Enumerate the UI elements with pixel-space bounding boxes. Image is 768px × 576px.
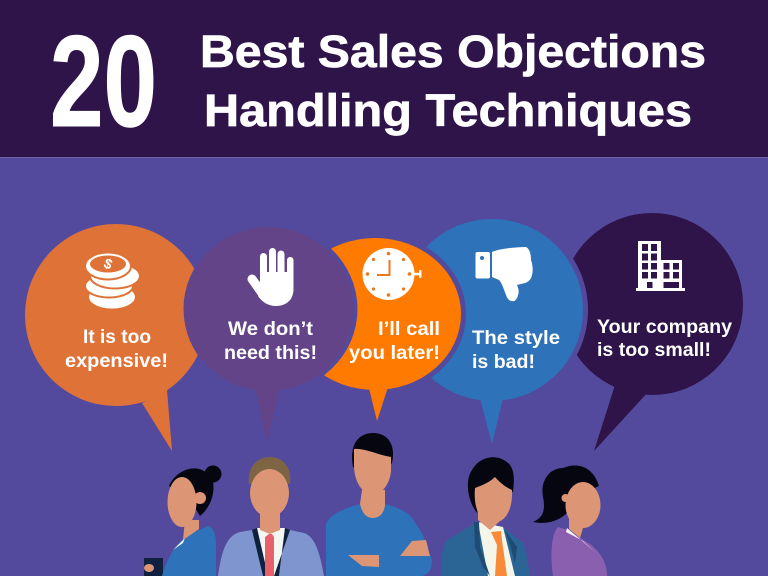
speech bubble: style is bad xyxy=(396,214,588,444)
icon: thumbs down xyxy=(476,247,533,301)
icon: clock xyxy=(362,248,422,300)
label: the style is bad: is bad! xyxy=(472,351,535,373)
title text: Best Sales Objections xyxy=(200,26,706,77)
label: it is too expensive: expensive! xyxy=(65,350,168,372)
label: the style is bad xyxy=(472,327,560,373)
speech bubble: call you later xyxy=(284,233,466,421)
icon: coins xyxy=(85,252,140,310)
label: the style is bad: The style xyxy=(472,327,560,349)
person: woman with ponytail xyxy=(533,466,607,576)
label: it is too expensive: It is too xyxy=(83,326,151,348)
icon: coins: $ xyxy=(102,255,115,272)
person: man with orange tie xyxy=(442,457,530,576)
label: your company is too small: Your company xyxy=(597,316,732,338)
person: woman with bun xyxy=(144,466,222,576)
speech bubble: too small xyxy=(561,213,743,451)
title text: Handling Techniques xyxy=(204,85,692,136)
label: we don't need this: We don’t xyxy=(228,318,314,340)
speech bubble: don't need this xyxy=(184,225,358,441)
icon: raised hand xyxy=(252,248,294,306)
label: we don't need this xyxy=(224,318,317,364)
header banner xyxy=(0,0,768,158)
label: I'll call you later: you later! xyxy=(349,342,440,364)
label: your company is too small: is too small! xyxy=(597,339,711,361)
title text xyxy=(200,26,706,136)
person: man with red tie xyxy=(218,457,324,576)
speech bubble: too expensive xyxy=(25,224,207,451)
label: it is too expensive xyxy=(65,326,168,372)
person: man with crossed arms xyxy=(326,433,432,576)
label: we don't need this: need this! xyxy=(224,342,317,364)
label: I'll call you later xyxy=(349,318,440,364)
icon: office building xyxy=(636,241,685,291)
label: I'll call you later: I’ll call xyxy=(378,318,440,340)
label: your company is too small xyxy=(597,316,732,361)
title number: 20 xyxy=(50,9,157,154)
